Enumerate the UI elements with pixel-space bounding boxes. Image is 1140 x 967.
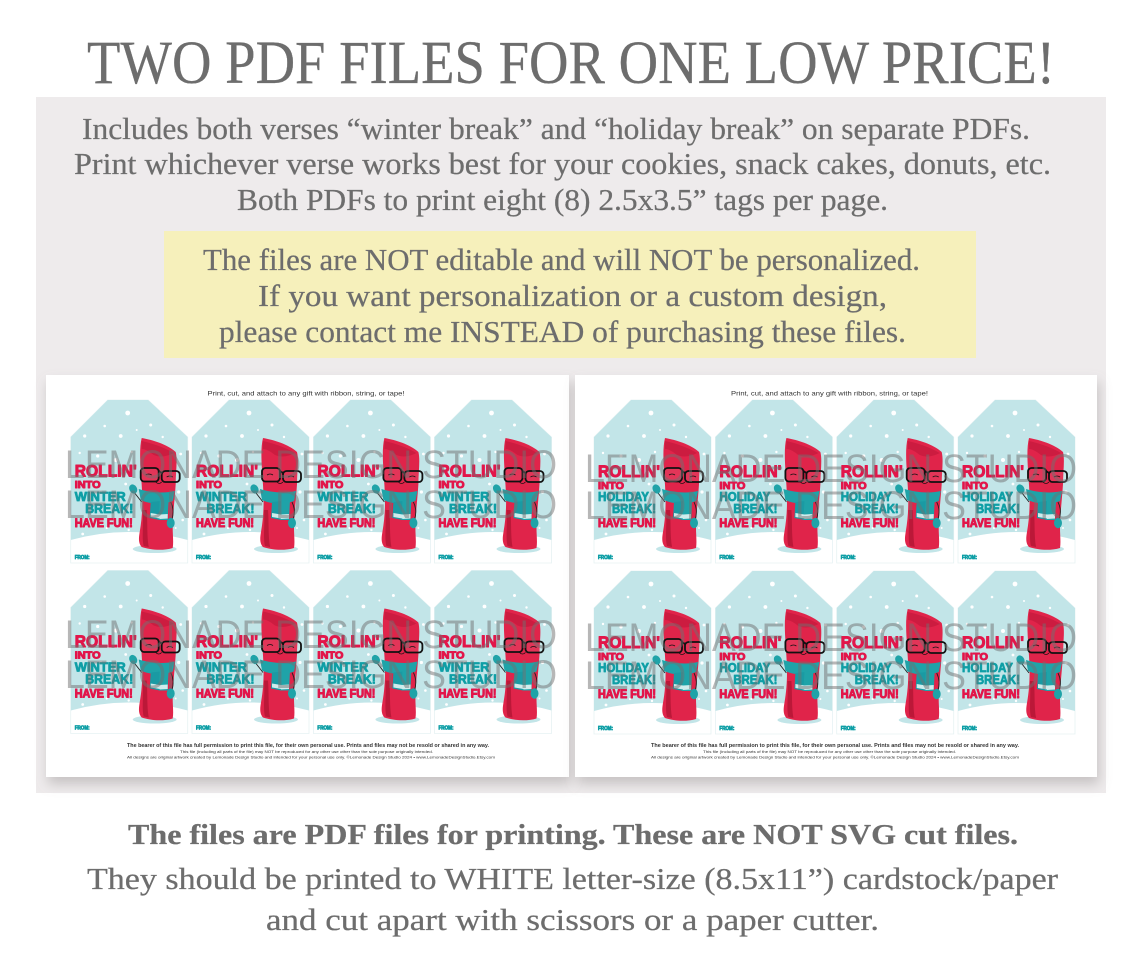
text block: file format notes: The files are PDF files for printing. These are NOT SVG cut files. xyxy=(128,819,1018,851)
tag 4 holiday xyxy=(958,400,1075,563)
permission footer: winter: The bearer of this file has full permission to print this file, for their own personal use. Prints and files may not be resold or shared in any way. xyxy=(127,743,489,749)
tag 7 holiday xyxy=(837,571,954,734)
tag 4 winter: INTO xyxy=(438,479,464,491)
tag 4 winter: ROLLIN' xyxy=(438,462,501,480)
tag 6 holiday: BREAK! xyxy=(733,672,777,687)
tag 2 winter: BREAK! xyxy=(206,501,254,516)
tag 7 holiday: ROLLIN' xyxy=(841,634,903,652)
tag 8 holiday: ROLLIN' xyxy=(962,634,1024,652)
text block: file format notes: They should be printed to WHITE letter-size (8.5x11”) cardstock/paper xyxy=(87,861,1059,896)
watermark: winter page: LEMONADE DESIGN STUDIO xyxy=(65,443,557,487)
watermark: holiday page: LEMONADE DESIGN STUDIO xyxy=(585,616,1077,660)
tag 3 holiday: FROM: xyxy=(841,555,856,561)
page sheet: holiday xyxy=(575,375,1097,777)
tag 1 winter: WINTER xyxy=(75,489,126,504)
watermark: holiday page: LEMONADE DESIGN STUDIO xyxy=(585,484,1077,528)
tag 5 winter: INTO xyxy=(75,650,101,662)
text block: included verses: Print whichever verse works best for your cookies, snack cakes, donuts, etc. xyxy=(74,146,1051,181)
tag 2 holiday: INTO xyxy=(719,480,745,492)
tag 3 winter: HAVE FUN! xyxy=(317,518,375,530)
tag 4 winter xyxy=(434,400,552,563)
tag 4 winter: BREAK! xyxy=(449,501,497,516)
tag 2 holiday: HOLIDAY xyxy=(719,489,771,504)
tag 4 winter: FROM: xyxy=(438,555,454,561)
tag 2 winter: FROM: xyxy=(196,555,211,561)
tag 1 holiday: HOLIDAY xyxy=(598,489,649,504)
tag 5 winter: BREAK! xyxy=(85,672,133,686)
tag 3 holiday: ROLLIN' xyxy=(841,463,903,481)
tag 3 holiday xyxy=(837,400,954,563)
tag 1 winter: FROM: xyxy=(75,555,90,561)
text block: included verses: Includes both verses “winter break” and “holiday break” on separate PDFs. xyxy=(82,111,1030,146)
tag 8 holiday: HAVE FUN! xyxy=(962,689,1020,701)
tag 3 winter: BREAK! xyxy=(328,501,376,516)
tag 4 holiday: HOLIDAY xyxy=(962,489,1013,504)
tag 5 winter: WINTER xyxy=(75,660,126,674)
tag 1 holiday: INTO xyxy=(598,480,624,492)
tag 7 holiday: INTO xyxy=(841,651,867,663)
tag 1 winter: BREAK! xyxy=(85,501,133,516)
tag 6 winter: ROLLIN' xyxy=(196,633,258,651)
tag 2 winter: ROLLIN' xyxy=(196,462,258,480)
panel: holiday break PDF preview xyxy=(575,375,1097,777)
tag 8 winter: FROM: xyxy=(438,726,454,732)
tag 8 holiday xyxy=(958,571,1075,734)
text block: included verses: Both PDFs to print eight (8) 2.5x3.5” tags per page. xyxy=(237,182,888,217)
tag 8 winter xyxy=(434,570,552,734)
tag 6 holiday: HOLIDAY xyxy=(719,660,771,675)
tag 2 holiday: HAVE FUN! xyxy=(719,518,777,530)
tag 4 holiday: BREAK! xyxy=(976,501,1020,516)
tag 7 holiday: BREAK! xyxy=(855,672,899,687)
tag 5 holiday: HAVE FUN! xyxy=(598,689,656,701)
tag 7 winter: BREAK! xyxy=(328,672,376,686)
tag 3 winter: ROLLIN' xyxy=(317,462,379,480)
tag 3 holiday: BREAK! xyxy=(855,501,899,516)
panel: winter break PDF preview xyxy=(46,375,569,777)
tag 6 winter: BREAK! xyxy=(206,672,254,686)
tag 1 winter: HAVE FUN! xyxy=(75,518,133,530)
callout: not editable notice: The files are NOT editable and will NOT be personalized. xyxy=(203,242,920,277)
permission footer: holiday: The bearer of this file has full permission to print this file, for their own personal use. Prints and files may not be resold or shared in any way. xyxy=(651,743,1019,749)
tag 3 holiday: INTO xyxy=(841,480,867,492)
watermark: winter page: LEMONADE DESIGN STUDIO xyxy=(65,483,557,527)
tag 3 winter: FROM: xyxy=(317,555,333,561)
permission footer: holiday: This file (including all parts of the file) may NOT be reproduced for any other use other than the sole purpose originally intended. xyxy=(703,750,956,754)
tag 5 holiday: ROLLIN' xyxy=(598,634,660,652)
permission footer: holiday: All designs are original artwork created by Lemonade Design Studio and intended for your personal use only. ©Lemonade Design Studio 2024 • www.LemonadeDesignStudio.Etsy.com xyxy=(651,756,1019,760)
tag 1 holiday: FROM: xyxy=(598,555,613,561)
tag 8 holiday: BREAK! xyxy=(976,672,1020,687)
tag 4 holiday: HAVE FUN! xyxy=(962,518,1020,530)
tag 2 holiday: FROM: xyxy=(719,555,735,561)
tag 8 winter: ROLLIN' xyxy=(438,633,501,651)
watermark: winter page: LEMONADE DESIGN STUDIO xyxy=(65,653,557,697)
tag 2 winter: WINTER xyxy=(196,489,248,504)
tag 5 holiday: BREAK! xyxy=(612,672,656,687)
tag 6 holiday: ROLLIN' xyxy=(719,634,781,652)
tag 3 winter xyxy=(313,400,430,563)
tag 8 holiday: FROM: xyxy=(962,726,977,732)
tag 5 winter: FROM: xyxy=(75,726,90,732)
tag 7 holiday: HOLIDAY xyxy=(841,660,892,675)
tag 8 holiday: HOLIDAY xyxy=(962,660,1013,675)
watermark: holiday page: LEMONADE DESIGN STUDIO xyxy=(585,654,1077,698)
watermark: holiday page xyxy=(585,447,1077,698)
tag 6 winter xyxy=(192,570,309,734)
tag 4 holiday: FROM: xyxy=(962,555,977,561)
tag 6 holiday: INTO xyxy=(719,651,745,663)
tag 7 winter: HAVE FUN! xyxy=(317,688,375,700)
tag 1 winter: INTO xyxy=(75,479,101,491)
tag 6 holiday xyxy=(715,571,832,734)
tag 8 winter: INTO xyxy=(438,650,464,662)
tag 1 holiday: BREAK! xyxy=(612,501,656,516)
tag 7 winter: ROLLIN' xyxy=(317,633,379,651)
tag 3 holiday: HAVE FUN! xyxy=(841,518,899,530)
tag 6 holiday: HAVE FUN! xyxy=(719,689,777,701)
tag 7 winter: WINTER xyxy=(317,660,369,674)
tag 1 holiday: HAVE FUN! xyxy=(598,518,656,530)
callout: not editable notice: If you want personalization or a custom design, xyxy=(258,278,887,313)
tag 5 holiday: INTO xyxy=(598,651,624,663)
tag 7 holiday: HAVE FUN! xyxy=(841,689,899,701)
permission footer: winter: All designs are original artwork created by Lemonade Design Studio and intended for your personal use only. ©Lemonade Design Studio 2024 • www.LemonadeDesignStudio.Etsy.com xyxy=(127,756,495,760)
permission footer: winter xyxy=(127,743,495,760)
tag 2 winter: HAVE FUN! xyxy=(196,518,254,530)
tag 4 winter: WINTER xyxy=(438,489,490,504)
tag 6 winter: HAVE FUN! xyxy=(196,688,254,700)
tag 8 winter: BREAK! xyxy=(449,672,497,686)
tag 3 holiday: HOLIDAY xyxy=(841,489,892,504)
title: TWO PDF FILES FOR ONE LOW PRICE! xyxy=(87,30,1055,97)
tag 1 winter xyxy=(71,400,188,563)
tag 8 holiday: INTO xyxy=(962,651,988,663)
page sheet: winter xyxy=(46,375,569,777)
watermark: winter page: LEMONADE DESIGN STUDIO xyxy=(65,613,557,657)
tag 2 holiday xyxy=(715,400,832,563)
tag 4 winter: HAVE FUN! xyxy=(438,518,496,530)
tag 5 holiday: HOLIDAY xyxy=(598,660,649,675)
tag 1 holiday: ROLLIN' xyxy=(598,463,660,481)
callout: not editable notice xyxy=(164,231,976,358)
tag 5 winter: ROLLIN' xyxy=(75,633,137,651)
tag 2 winter: INTO xyxy=(196,479,222,491)
tag 4 holiday: INTO xyxy=(962,480,988,492)
panel: product details background xyxy=(36,97,1106,793)
callout: not editable notice: please contact me INSTEAD of purchasing these files. xyxy=(219,314,906,349)
page instruction: winter: Print, cut, and attach to any gift with ribbon, string, or tape! xyxy=(208,390,405,398)
text block: included verses xyxy=(74,111,1051,217)
tag 7 winter: FROM: xyxy=(317,726,333,732)
tag 7 winter xyxy=(313,570,430,734)
tag 5 holiday: FROM: xyxy=(598,726,613,732)
tag 1 holiday xyxy=(594,400,711,563)
page instruction: holiday: Print, cut, and attach to any gift with ribbon, string, or tape! xyxy=(731,390,928,398)
watermark: winter page xyxy=(65,443,557,697)
text block: file format notes: and cut apart with scissors or a paper cutter. xyxy=(266,902,879,937)
tag 3 winter: WINTER xyxy=(317,489,369,504)
tag 1 winter: ROLLIN' xyxy=(75,462,137,480)
permission footer: winter: This file (including all parts of the file) may NOT be reproduced for any other use other than the sole purpose originally intended. xyxy=(180,750,433,754)
tag 5 winter: HAVE FUN! xyxy=(75,688,133,700)
tag 5 winter xyxy=(71,570,188,734)
tag 7 holiday: FROM: xyxy=(841,726,856,732)
permission footer: holiday xyxy=(651,743,1019,760)
tag 4 holiday: ROLLIN' xyxy=(962,463,1024,481)
tag 6 winter: INTO xyxy=(196,650,222,662)
tag 6 winter: FROM: xyxy=(196,726,211,732)
text block: file format notes xyxy=(87,819,1059,937)
tag 6 holiday: FROM: xyxy=(719,726,735,732)
watermark: holiday page: LEMONADE DESIGN STUDIO xyxy=(585,447,1077,491)
tag 2 holiday: ROLLIN' xyxy=(719,463,781,481)
tag 3 winter: INTO xyxy=(317,479,343,491)
tag 5 holiday xyxy=(594,571,711,734)
tag 8 winter: HAVE FUN! xyxy=(438,688,496,700)
tag 2 holiday: BREAK! xyxy=(733,501,777,516)
tag 7 winter: INTO xyxy=(317,650,343,662)
tag 8 winter: WINTER xyxy=(438,660,490,674)
tag 6 winter: WINTER xyxy=(196,660,248,674)
tag 2 winter xyxy=(192,400,309,563)
